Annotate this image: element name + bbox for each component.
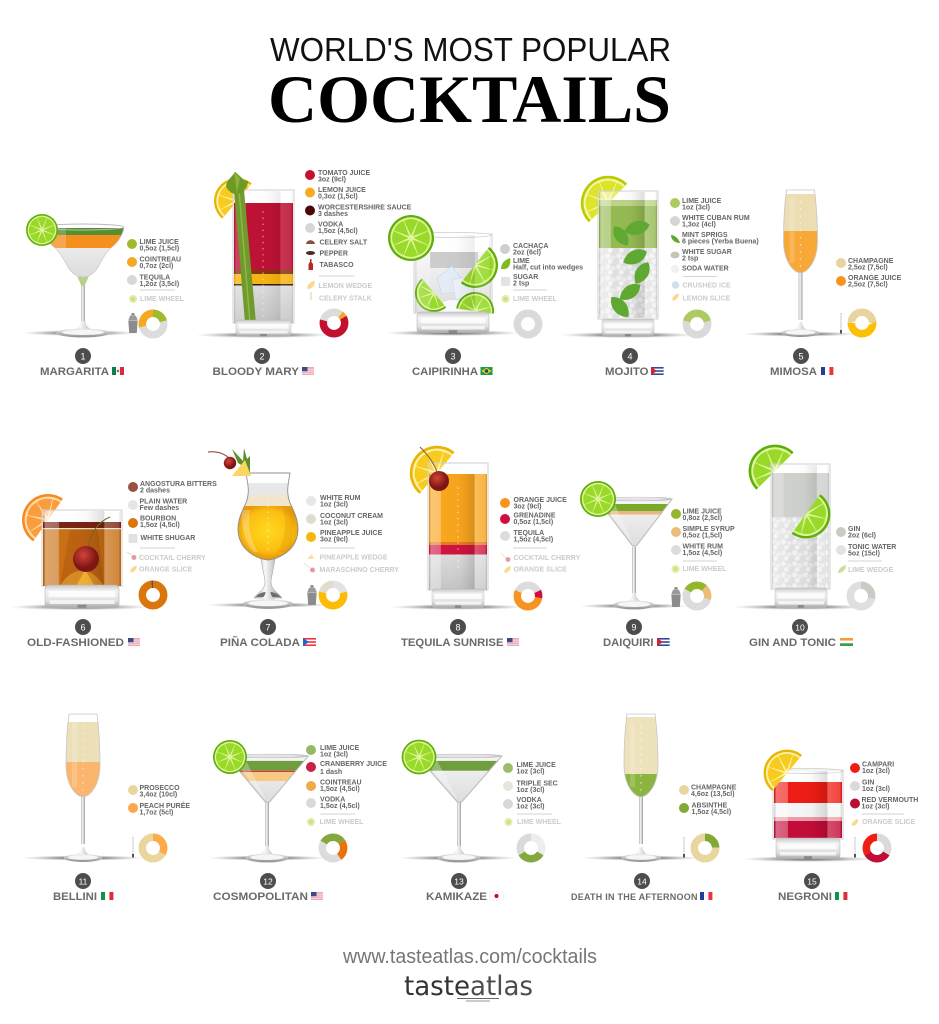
legend: LIME WEDGE <box>848 567 893 574</box>
flag: France <box>700 892 712 900</box>
legend: SIMPLE SYRUP <box>682 526 735 533</box>
icon: shaker <box>307 585 317 605</box>
legend: COCKTAIL CHERRY <box>139 555 206 562</box>
legend: PLAIN WATER <box>140 498 187 505</box>
number badge <box>75 619 91 635</box>
icon: lime wheel <box>213 740 247 774</box>
icon: bar spoon <box>132 837 134 858</box>
number badge: 4 <box>627 351 633 361</box>
name: DEATH IN THE AFTERNOON <box>571 892 698 902</box>
name: NEGRONI <box>778 891 832 903</box>
panel: negroni <box>747 750 918 900</box>
name: CAIPIRINHA <box>412 366 478 378</box>
legend: MINT SPRIGS <box>682 232 728 239</box>
legend: WHITE SHUGAR <box>140 535 195 542</box>
icon: bar spoon <box>840 313 842 334</box>
title: COCKTAILS <box>268 61 671 137</box>
number badge <box>450 619 466 635</box>
donut chart <box>686 313 708 335</box>
legend <box>671 508 735 573</box>
icon: lemon wedge <box>214 178 252 219</box>
legend: ORANGE JUICE <box>848 275 901 282</box>
legend: CHAMPAGNE <box>691 784 736 792</box>
legend: 1oz (3cl) <box>862 803 890 810</box>
legend <box>306 745 387 826</box>
legend: LIME WHEEL <box>517 819 562 826</box>
number badge <box>622 348 638 364</box>
legend: 0,8oz (2,5cl) <box>682 515 722 522</box>
flag: France <box>821 367 833 375</box>
flag: Cuba <box>651 367 664 375</box>
legend: TABASCO <box>320 262 354 269</box>
legend: COCONUT CREAM <box>320 513 383 520</box>
legend <box>679 784 737 816</box>
legend: 1,5oz (4,5cl) <box>682 550 722 557</box>
icon: rocks glass <box>773 768 843 859</box>
icon: champagne flute <box>781 190 820 337</box>
legend: CACHAÇA <box>513 243 548 250</box>
legend: 2oz (6cl) <box>848 532 876 539</box>
legend: 1,5oz (4,5cl) <box>320 786 360 793</box>
panel: mojito <box>560 165 759 378</box>
legend: 0,3oz (1,5cl) <box>318 194 358 200</box>
flag: Italy <box>835 892 847 900</box>
panel: pina colada <box>206 448 399 649</box>
donut chart <box>323 312 345 334</box>
number badge: 6 <box>80 622 86 632</box>
panel: death in the afternoon <box>571 714 737 902</box>
icon: highball glass <box>428 463 488 608</box>
legend: 3oz (9cl) <box>318 176 346 183</box>
legend: TRIPLE SEC <box>516 780 558 788</box>
name: TEQUILA SUNRISE <box>401 637 504 649</box>
panel: bloody mary <box>195 169 412 378</box>
legend: 2 tsp <box>682 256 698 262</box>
legend <box>127 481 217 574</box>
legend: 3,4oz (10cl) <box>140 792 177 799</box>
number badge: 2 <box>259 351 265 361</box>
donut chart <box>142 584 164 606</box>
icon: orange slice <box>22 494 63 542</box>
number badge <box>75 873 91 889</box>
legend: LIME JUICE <box>516 762 556 769</box>
icon: lime wheel <box>580 481 616 517</box>
panel: kamikaze <box>398 740 562 903</box>
donut chart <box>694 837 716 859</box>
legend: 1oz (3cl) <box>862 768 890 775</box>
number badge <box>793 348 809 364</box>
legend: PEACH PURÉE <box>140 803 190 810</box>
panel: old-fashioned <box>10 481 217 649</box>
logo: tasteatlas: tasteatlas <box>404 971 533 1002</box>
legend: ABSINTHE <box>692 802 727 810</box>
number badge: 3 <box>450 351 456 361</box>
legend: BOURBON <box>140 516 176 522</box>
legend: LEMON JUICE <box>318 187 366 194</box>
icon: lime wheel <box>402 740 436 774</box>
legend: SUGAR <box>513 274 538 281</box>
legend: 1,5oz (4,5cl) <box>140 522 180 529</box>
legend: LEMON SLICE <box>682 296 731 302</box>
name: MOJITO <box>605 366 649 378</box>
icon: champagne flute <box>64 714 102 862</box>
legend: 3oz (9cl) <box>320 536 348 543</box>
legend: 1oz (3cl) <box>516 803 545 810</box>
icon: martini glass <box>430 754 503 862</box>
legend: 3oz (9cl) <box>514 503 542 510</box>
legend: 1,7oz (5cl) <box>140 810 173 816</box>
legend: VODKA <box>516 797 542 804</box>
number badge: 9 <box>631 622 637 632</box>
number badge <box>254 348 270 364</box>
number badge: 11 <box>79 876 88 886</box>
legend: 1oz (3cl) <box>320 751 348 758</box>
legend: PROSECCO <box>140 785 180 792</box>
legend: GIN <box>862 780 874 786</box>
flag: Japan <box>490 892 503 900</box>
donut chart <box>322 837 344 859</box>
panel: bellini <box>21 714 190 903</box>
icon: pineapple and cherry garnish <box>208 448 251 476</box>
legend: PINEAPPLE WEDGE <box>320 554 388 562</box>
legend: LIME WHEEL <box>513 296 558 303</box>
number badge: 8 <box>455 622 461 632</box>
legend: ORANGE SLICE <box>139 566 193 574</box>
legend: LIME JUICE <box>140 239 179 246</box>
legend: WHITE RUM <box>320 495 360 502</box>
icon: highball glass <box>233 190 294 336</box>
legend: MARASCHINO CHERRY <box>320 567 399 574</box>
donut chart <box>517 313 539 335</box>
title: WORLD'S MOST POPULAR <box>270 31 671 68</box>
icon: lemon wedge <box>580 176 628 222</box>
legend: 2oz (6cl) <box>513 250 541 256</box>
icon: orange wedge <box>410 446 454 494</box>
legend: RED VERMOUTH <box>862 797 918 804</box>
icon: lime wedge in glass <box>792 494 830 538</box>
legend: PEPPER <box>320 250 348 258</box>
flag: India <box>840 638 853 646</box>
panel: caipirinha <box>385 215 583 378</box>
legend: LIME WHEEL <box>140 296 185 303</box>
panel: mimosa <box>742 190 902 378</box>
legend: GRENADINE <box>514 512 556 520</box>
legend: 1oz (3cl) <box>682 204 710 212</box>
legend: TEQUILA <box>140 274 170 282</box>
icon: cherry <box>73 517 110 572</box>
legend: 0,5oz (1,5cl) <box>140 245 179 252</box>
number badge <box>260 619 276 635</box>
number badge: 15 <box>807 876 817 886</box>
flag: Cuba <box>657 638 670 646</box>
legend <box>670 198 759 302</box>
legend: TOMATO JUICE <box>318 170 370 177</box>
panel: gin and tonic <box>732 434 896 649</box>
legend: 0,5oz (1,5cl) <box>682 532 722 539</box>
number badge: 13 <box>454 876 464 886</box>
legend <box>128 785 190 816</box>
legend: 0,7oz (2cl) <box>140 263 173 270</box>
icon: shaker <box>128 313 138 333</box>
legend: 1 dash <box>320 769 342 776</box>
flag: USA <box>128 638 140 646</box>
icon: highball glass <box>598 191 658 336</box>
legend: LIME WHEEL <box>320 819 364 826</box>
icon: rocks glass <box>42 510 122 608</box>
legend: 1oz (3cl) <box>516 768 545 775</box>
donut chart <box>686 585 708 607</box>
icon: lime wheel <box>388 215 434 261</box>
panel: cosmopolitan <box>207 740 387 903</box>
flag: USA <box>507 638 519 646</box>
legend: 1,5oz (4,5cl) <box>320 803 360 810</box>
legend: COINTREAU <box>140 256 181 264</box>
legend: 2 tsp <box>513 280 529 287</box>
legend: 1,5oz (4,5cl) <box>692 809 731 816</box>
icon: highball glass <box>770 464 830 608</box>
legend: Few dashes <box>140 505 179 512</box>
name: PIÑA COLADA <box>220 636 300 649</box>
donut chart <box>142 837 164 859</box>
legend: PINEAPPLE JUICE <box>320 530 382 537</box>
website url: www.tasteatlas.com/cocktails <box>342 946 597 968</box>
flag: Puerto Rico <box>303 638 316 646</box>
legend: CELERY SALT <box>320 240 368 246</box>
legend <box>305 170 412 302</box>
number badge: 1 <box>80 351 86 361</box>
number badge: 7 <box>265 622 271 632</box>
legend: CRANBERRY JUICE <box>320 761 387 768</box>
legend: 1oz (3cl) <box>320 519 348 526</box>
legend: 2,5oz (7,5cl) <box>848 281 888 288</box>
legend: ORANGE SLICE <box>514 566 567 574</box>
legend <box>503 762 562 826</box>
number badge <box>804 873 820 889</box>
flag: Mexico <box>112 367 124 375</box>
icon: celery leaves <box>226 172 248 194</box>
legend: ORANGE JUICE <box>514 497 567 504</box>
name: OLD-FASHIONED <box>27 637 124 649</box>
number badge <box>792 619 808 635</box>
legend: CELERY STALK <box>319 296 372 302</box>
legend: CHAMPAGNE <box>848 258 893 265</box>
icon: martini glass <box>239 754 310 862</box>
icon: martini glass <box>608 496 673 610</box>
flag: USA <box>302 367 314 375</box>
legend: Half, cut into wedges <box>513 264 583 271</box>
icon: cherry <box>420 447 449 491</box>
legend: 5oz (15cl) <box>848 550 880 557</box>
legend: CRUSHED ICE <box>682 282 731 290</box>
donut chart <box>322 584 344 606</box>
icon: bar spoon <box>683 837 685 858</box>
icon: margarita glass <box>50 224 124 338</box>
icon: hurricane glass <box>236 472 300 609</box>
donut chart <box>850 585 872 607</box>
panel: margarita <box>22 214 185 378</box>
legend <box>304 495 399 574</box>
legend: LIME WHEEL <box>682 566 727 573</box>
legend: LIME <box>513 258 530 265</box>
legend: LIME JUICE <box>682 198 721 205</box>
number badge: 5 <box>798 351 804 361</box>
legend: SODA WATER <box>682 266 729 272</box>
number badge: 10 <box>795 622 805 632</box>
legend: ORANGE SLICE <box>862 819 916 826</box>
number badge <box>75 348 91 364</box>
number badge <box>626 619 642 635</box>
legend: VODKA <box>320 796 345 803</box>
legend: WORCESTERSHIRE SAUCE <box>318 204 411 212</box>
legend: TONIC WATER <box>848 544 896 551</box>
number badge: 12 <box>263 876 273 886</box>
legend: WHITE RUM <box>682 544 723 550</box>
legend <box>836 526 896 574</box>
legend: 3 dashes <box>318 211 348 218</box>
name: COSMOPOLITAN <box>213 891 308 903</box>
legend: 1,3oz (4cl) <box>682 222 716 229</box>
donut chart <box>517 585 539 607</box>
icon: mint leaves <box>606 218 654 321</box>
name: BLOODY MARY <box>212 366 300 378</box>
number badge: 14 <box>637 876 647 886</box>
legend: 2 dashes <box>140 487 170 494</box>
icon: bar spoon <box>854 837 856 858</box>
legend: 2,5oz (7,5cl) <box>848 264 888 271</box>
flag: Brazil <box>480 367 492 375</box>
legend: LIME JUICE <box>682 508 722 515</box>
icon: lime wedge <box>748 444 794 490</box>
name: GIN AND TONIC <box>749 637 836 649</box>
legend <box>836 258 902 288</box>
legend: 1oz (3cl) <box>320 501 348 508</box>
legend <box>850 762 918 826</box>
icon: shaker <box>671 587 681 607</box>
donut chart <box>851 312 873 334</box>
legend: ANGOSTURA BITTERS <box>140 481 217 488</box>
legend: CAMPARI <box>862 762 894 768</box>
legend: 1,5oz (4,5cl) <box>514 536 553 543</box>
legend: 4,6oz (13,5cl) <box>691 791 735 798</box>
name: MIMOSA <box>770 366 817 378</box>
legend: VODKA <box>318 222 343 228</box>
legend: 0,5oz (1,5cl) <box>514 519 553 526</box>
legend: 1oz (3cl) <box>862 786 890 793</box>
flag: Italy <box>101 892 113 900</box>
flag: USA <box>311 892 323 900</box>
legend: WHITE CUBAN RUM <box>682 215 750 222</box>
legend: TEQUILA <box>514 530 544 537</box>
legend: LEMON WEDGE <box>318 283 372 290</box>
panel: tequila sunrise <box>390 435 581 649</box>
donut chart <box>866 837 888 859</box>
legend: 1,2oz (3,5cl) <box>140 281 179 288</box>
number badge <box>451 873 467 889</box>
legend: 1oz (3cl) <box>516 787 545 794</box>
name: BELLINI <box>53 891 97 903</box>
legend: LIME JUICE <box>320 745 359 752</box>
legend <box>500 497 581 574</box>
icon: orange slice <box>764 750 802 791</box>
legend <box>127 239 185 303</box>
legend: 6 pieces (Yerba Buena) <box>682 238 759 246</box>
icon: lime wheel <box>26 214 58 246</box>
legend: GIN <box>848 526 860 533</box>
icon: rocks glass <box>414 232 498 334</box>
legend: WHITE SUGAR <box>682 249 732 256</box>
name: KAMIKAZE <box>426 891 487 903</box>
legend: 1,5oz (4,5cl) <box>318 228 358 235</box>
name: MARGARITA <box>40 366 109 378</box>
number badge <box>260 873 276 889</box>
donut chart <box>520 837 542 859</box>
legend: COCKTAIL CHERRY <box>514 555 581 562</box>
name: DAIQUIRI <box>603 637 654 649</box>
number badge <box>634 873 650 889</box>
legend: COINTREAU <box>320 779 362 786</box>
donut chart <box>142 313 164 335</box>
number badge <box>445 348 461 364</box>
icon: champagne flute <box>621 714 661 862</box>
panel: daiquiri <box>579 481 735 649</box>
legend <box>500 243 583 303</box>
